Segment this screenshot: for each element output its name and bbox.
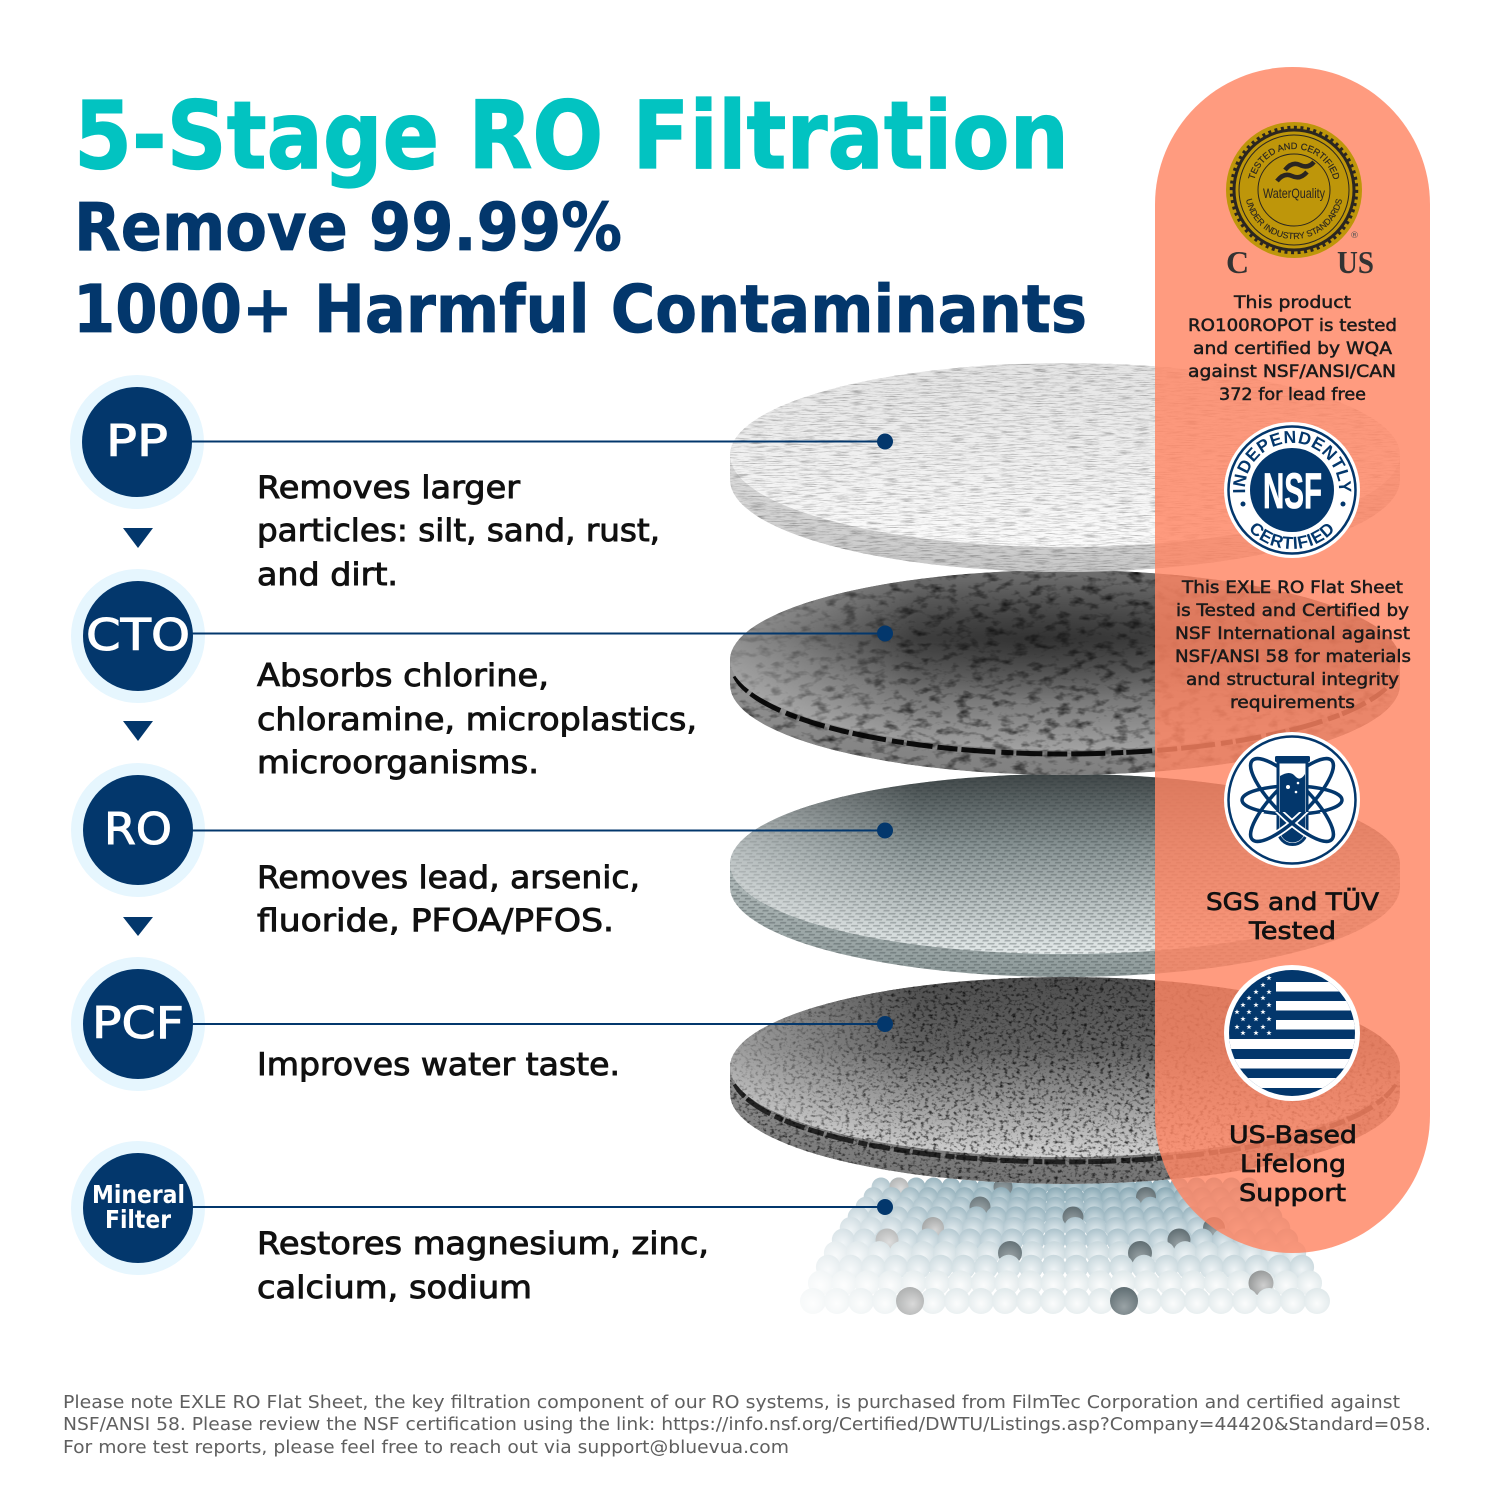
icon: C US mark: ®	[1350, 231, 1359, 241]
disc: PCF carbon filter	[730, 977, 1400, 1184]
icon: NSF badge: CERTIFIED	[1250, 523, 1333, 549]
text: NSF certification	[1175, 578, 1411, 713]
text: PP description: and dirt.	[257, 557, 398, 593]
stage: CTO	[71, 569, 893, 703]
stage: CTO: CTO	[86, 610, 190, 661]
icon: science test tube and atom	[1224, 732, 1360, 868]
stage: PCF: PCF	[92, 998, 184, 1049]
text: CTO description: Absorbs chlorine,	[257, 658, 549, 694]
title: 5-Stage RO Filtration	[74, 82, 1069, 191]
text: RO description: Removes lead, arsenic,	[257, 860, 640, 896]
text: CTO description: chloramine, microplastics,	[257, 702, 697, 738]
text: NSF certification: This EXLE RO Flat Sheet	[1181, 578, 1403, 598]
text: WQA certification: and certified by WQA	[1193, 339, 1392, 359]
text: PCF description: Improves water taste.	[257, 1047, 620, 1083]
disc: RO membrane	[730, 774, 1400, 977]
text: SGS and TUV: SGS and TÜV	[1206, 887, 1380, 916]
text: US-based support: Lifelong	[1240, 1150, 1346, 1178]
subtitle: 1000+ Harmful Contaminants	[73, 271, 1087, 348]
text: US-based support: US-Based	[1229, 1121, 1357, 1149]
stage: Mineral Filter: Filter	[105, 1205, 172, 1234]
text: SGS and TUV: Tested	[1248, 917, 1336, 945]
subtitle	[73, 189, 1087, 348]
stage: PP	[70, 375, 893, 509]
arrow: PP to CTO	[123, 528, 153, 548]
text: US-based support: Support	[1239, 1179, 1346, 1207]
footnote: For more test reports, please feel free to reach out via support@bluevua.com	[63, 1437, 789, 1458]
text: NSF certification: NSF International against	[1175, 624, 1410, 644]
stage: RO: RO	[104, 804, 172, 855]
text: PP description: Removes larger	[257, 470, 520, 506]
text: Mineral description: Restores magnesium, zinc,	[257, 1226, 709, 1262]
stage: RO	[71, 763, 893, 897]
footnote: NSF/ANSI 58. Please review the NSF certification using the link: https://info.nsf.org/Certified/DWTU/Listings.asp?Company=44420&Standard=058.	[63, 1414, 1431, 1435]
text: WQA certification: This product	[1233, 293, 1351, 313]
icon: NSF badge: INDEPENDENTLY	[1233, 430, 1352, 492]
footnote: Please note EXLE RO Flat Sheet, the key filtration component of our RO systems, is purchased from FilmTec Corporation and certified against	[63, 1392, 1400, 1413]
icon: C US mark: C	[1226, 244, 1249, 280]
icon: C US mark: US	[1337, 244, 1374, 280]
panel: certifications background	[1155, 67, 1430, 1253]
text: WQA certification: against NSF/ANSI/CAN	[1188, 362, 1396, 382]
arrow: CTO to RO	[123, 721, 153, 741]
text: CTO description	[257, 658, 697, 781]
arrow: RO to PCF	[123, 917, 153, 936]
text: CTO description: microorganisms.	[257, 745, 539, 781]
icon: WQA gold seal: WaterQuality	[1263, 185, 1325, 201]
text: NSF certification: requirements	[1230, 693, 1355, 713]
text: NSF certification: NSF/ANSI 58 for materials	[1175, 647, 1411, 667]
text: SGS and TUV	[1206, 887, 1380, 945]
text: NSF certification: is Tested and Certified by	[1176, 601, 1409, 621]
icon: NSF badge: NSF	[1263, 463, 1322, 519]
stage: PP: PP	[106, 416, 168, 467]
icon: NSF badge	[1224, 422, 1360, 558]
text: WQA certification: RO100ROPOT is tested	[1188, 316, 1397, 336]
stage: Mineral Filter	[71, 1141, 893, 1275]
text: US-based support	[1229, 1121, 1357, 1207]
icon: WQA gold seal: TESTED AND CERTIFIED	[1248, 142, 1340, 179]
text: Mineral description	[257, 1226, 709, 1306]
text: RO description: fluoride, PFOA/PFOS.	[257, 903, 614, 939]
text: RO description	[257, 860, 640, 939]
text: PP description: particles: silt, sand, rust,	[257, 513, 660, 549]
disc: CTO carbon block	[730, 570, 1400, 775]
text: PP description	[257, 470, 660, 593]
stage: Mineral Filter: Mineral	[92, 1180, 185, 1209]
stage: PCF	[71, 957, 893, 1091]
icon: WQA gold seal	[1226, 122, 1362, 258]
subtitle: Remove 99.99%	[74, 189, 622, 266]
disc: PP sediment	[730, 363, 1400, 572]
footnote	[63, 1392, 1431, 1458]
mineral beads layer	[790, 1170, 1340, 1320]
icon: C US mark	[1226, 231, 1374, 280]
icon: WQA gold seal: UNDER INDUSTRY STANDARDS	[1246, 198, 1342, 240]
text: WQA certification: 372 for lead free	[1219, 385, 1366, 405]
icon: US flag	[1224, 965, 1366, 1101]
text: WQA certification	[1188, 293, 1397, 405]
text: Mineral description: calcium, sodium	[257, 1270, 532, 1306]
text: NSF certification: and structural integrity	[1186, 670, 1399, 690]
